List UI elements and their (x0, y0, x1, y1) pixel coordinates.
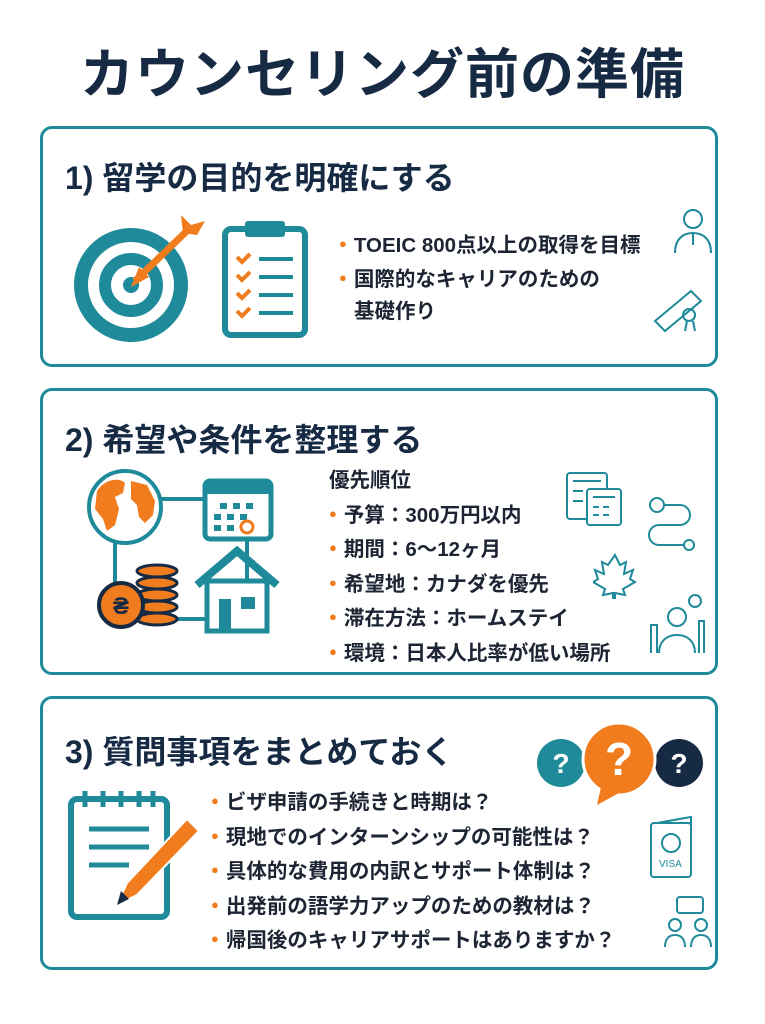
heading 3: 3) 質問事項をまとめておく (65, 734, 453, 770)
icon: visa passport: VISA (659, 859, 682, 870)
panel: 1 purpose (40, 126, 718, 367)
icon: speech bubbles: ? (670, 748, 688, 779)
heading 1: 1) 留学の目的を明確にする (65, 160, 455, 196)
questions list: ● ビザ申請の手続きと時期は？ (211, 791, 492, 814)
questions list: ● 帰国後のキャリアサポートはありますか？ (211, 929, 615, 952)
icon: target (74, 215, 205, 342)
questions list: ● 現地でのインターンシップの可能性は？ (211, 826, 594, 848)
icon: person city (650, 594, 705, 653)
icon group: globe calendar coins house: ₴ (113, 593, 129, 620)
bullets 1: ● 国際的なキャリアのための (339, 268, 600, 291)
icon: speech bubbles (537, 724, 703, 805)
icon: consultation (664, 896, 712, 947)
heading 2: 2) 希望や条件を整理する (65, 422, 422, 458)
icon: clipboard (222, 221, 308, 338)
icon: diploma (654, 290, 702, 332)
icon: visa passport (650, 816, 692, 878)
panel: 2 wishes (40, 388, 718, 675)
questions list: ● 具体的な費用の内訳とサポート体制は？ (211, 860, 595, 883)
priority list: ● 滞在方法：ホームステイ (329, 607, 569, 630)
icon: speech bubbles: ? (552, 748, 570, 779)
priority list: ● 予算：300万円以内 (329, 504, 522, 526)
priority list: ● 希望地：カナダを優先 (329, 572, 549, 596)
bullets 1: 基礎作り (354, 300, 436, 323)
priority list (329, 469, 610, 664)
icon: businessman (674, 209, 712, 253)
icon: speech bubbles: ? (605, 733, 633, 785)
questions list (211, 791, 615, 952)
priority list: ● 環境：日本人比率が低い場所 (329, 642, 610, 664)
icon: timeline (648, 497, 695, 551)
icon: maple leaf (593, 553, 637, 599)
questions list: ● 出発前の語学力アップのための教材は？ (211, 894, 595, 918)
bullets 1: ● TOEIC 800点以上の取得を目標 (339, 234, 641, 257)
icon: calculator (566, 472, 622, 526)
priority list: 優先順位 (329, 469, 411, 492)
icon: notepad pen (68, 791, 198, 920)
panel: 3 questions (40, 696, 718, 970)
bullets 1 (339, 234, 641, 323)
priority list: ● 期間：6〜12ヶ月 (329, 538, 501, 561)
title: カウンセリング前の準備 (80, 45, 685, 105)
icon group: globe calendar coins house (87, 469, 280, 634)
